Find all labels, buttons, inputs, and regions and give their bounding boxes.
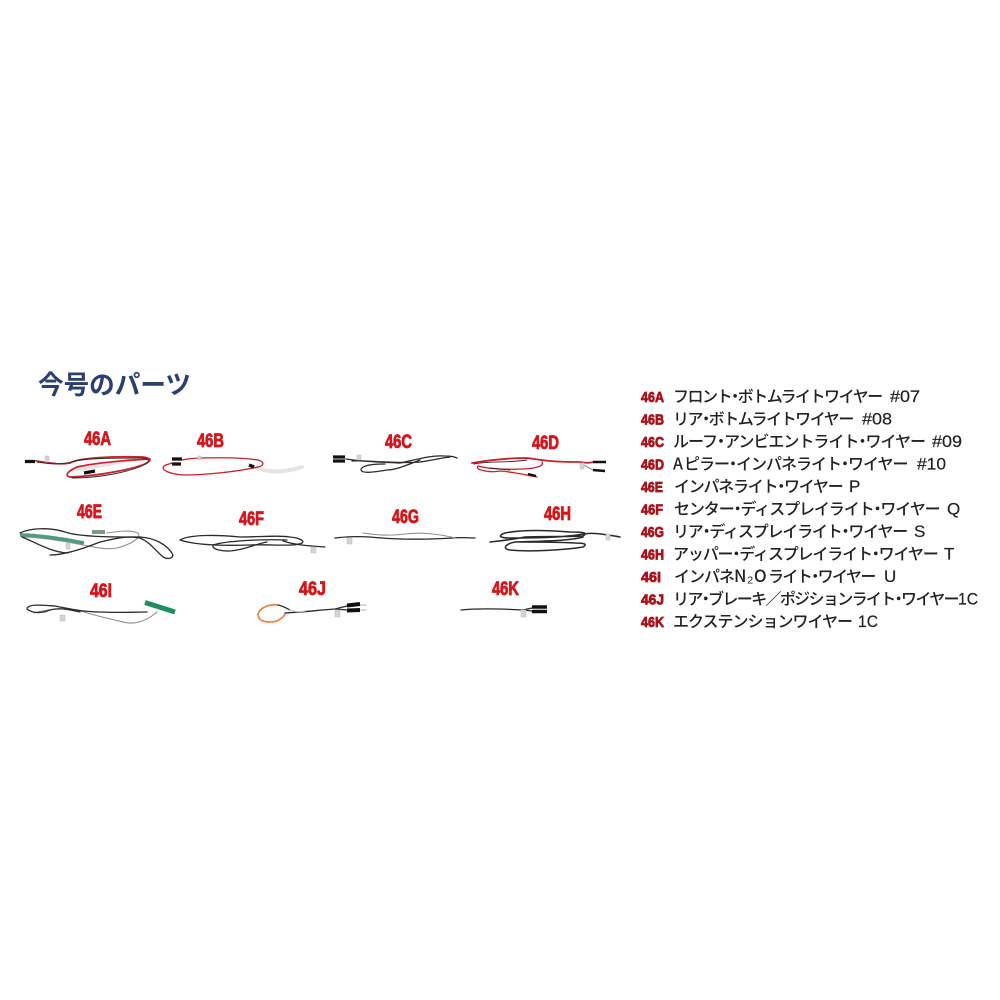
list row 46B: 46B <box>641 412 664 428</box>
part 46K <box>461 579 547 617</box>
list row 46E: インパネライト・ワイヤー <box>674 473 843 497</box>
list row 46E: 46E <box>641 479 663 496</box>
list row 46J: 1C <box>958 590 978 608</box>
list row 46G: 46G <box>641 524 664 541</box>
list row 46B: #08 <box>862 410 892 428</box>
list row 46F: センター・ディスプレイライト・ワイヤー <box>674 496 940 520</box>
list row 46I: U <box>884 567 896 586</box>
part 46E <box>20 502 173 558</box>
part 46E: 46E <box>77 502 102 523</box>
part 46I: 46I <box>90 581 112 602</box>
panel: parts photos <box>20 429 620 623</box>
part 46J: 46J <box>299 579 326 600</box>
list row 46E: P <box>849 477 860 496</box>
list row 46I: 46I <box>641 569 661 586</box>
list row 46H: アッパー・ディスプレイライト・ワイヤー <box>673 540 938 564</box>
list row 46D: Aピラー・インパネライト・ワイヤー <box>673 450 908 474</box>
parts list <box>641 383 978 632</box>
list row 46A: フロント・ボトムライトワイヤー <box>673 383 882 407</box>
part 46D: 46D <box>532 433 559 454</box>
list row 46D: #10 <box>917 454 946 474</box>
part 46G: 46G <box>392 507 419 528</box>
list row 46H: 46H <box>641 546 664 564</box>
list row 46I: インパネN₂O <box>674 562 767 587</box>
part 46I <box>27 581 175 623</box>
list row 46I: ライト・ワイヤー <box>768 563 875 587</box>
part 46K: 46K <box>492 579 519 600</box>
list row 46K: エクステンションワイヤー <box>673 608 852 632</box>
list row 46I <box>641 562 896 587</box>
list row 46K: 1C <box>858 612 878 631</box>
part 46F: 46F <box>239 509 264 530</box>
list row 46F: 46F <box>641 502 663 518</box>
part 46B <box>163 431 302 475</box>
part 46D <box>472 433 606 477</box>
list row 46A: 46A <box>641 389 664 406</box>
part 46F <box>180 509 325 553</box>
part 46J <box>258 579 366 622</box>
list row 46J: リア・ブレーキ／ポジションライト・ワイヤー <box>673 586 959 610</box>
list row 46D: 46D <box>641 456 664 474</box>
part 46H <box>490 504 620 551</box>
list row 46F: Q <box>947 500 960 518</box>
list row 46C: 46C <box>641 434 664 451</box>
title: 今号のパーツ <box>38 370 191 400</box>
list row 46C: ルーフ・アンビエントライト・ワイヤー <box>673 428 925 452</box>
part 46A <box>25 429 150 478</box>
list row 46J: 46J <box>641 592 664 608</box>
part 46C <box>333 432 457 472</box>
list row 46K: 46K <box>641 614 664 631</box>
list row 46A: #07 <box>890 387 920 406</box>
part 46H: 46H <box>544 504 571 525</box>
part 46C: 46C <box>385 432 412 453</box>
list row 46G: S <box>914 522 925 541</box>
part 46A: 46A <box>84 429 111 450</box>
list row 46G: リア・ディスプレイライト・ワイヤー <box>673 518 907 542</box>
part 46G <box>335 507 475 544</box>
list row 46B: リア・ボトムライトワイヤー <box>673 406 853 430</box>
list row 46H: T <box>944 544 954 564</box>
part 46B: 46B <box>197 431 224 452</box>
list row 46C: #09 <box>932 432 962 451</box>
